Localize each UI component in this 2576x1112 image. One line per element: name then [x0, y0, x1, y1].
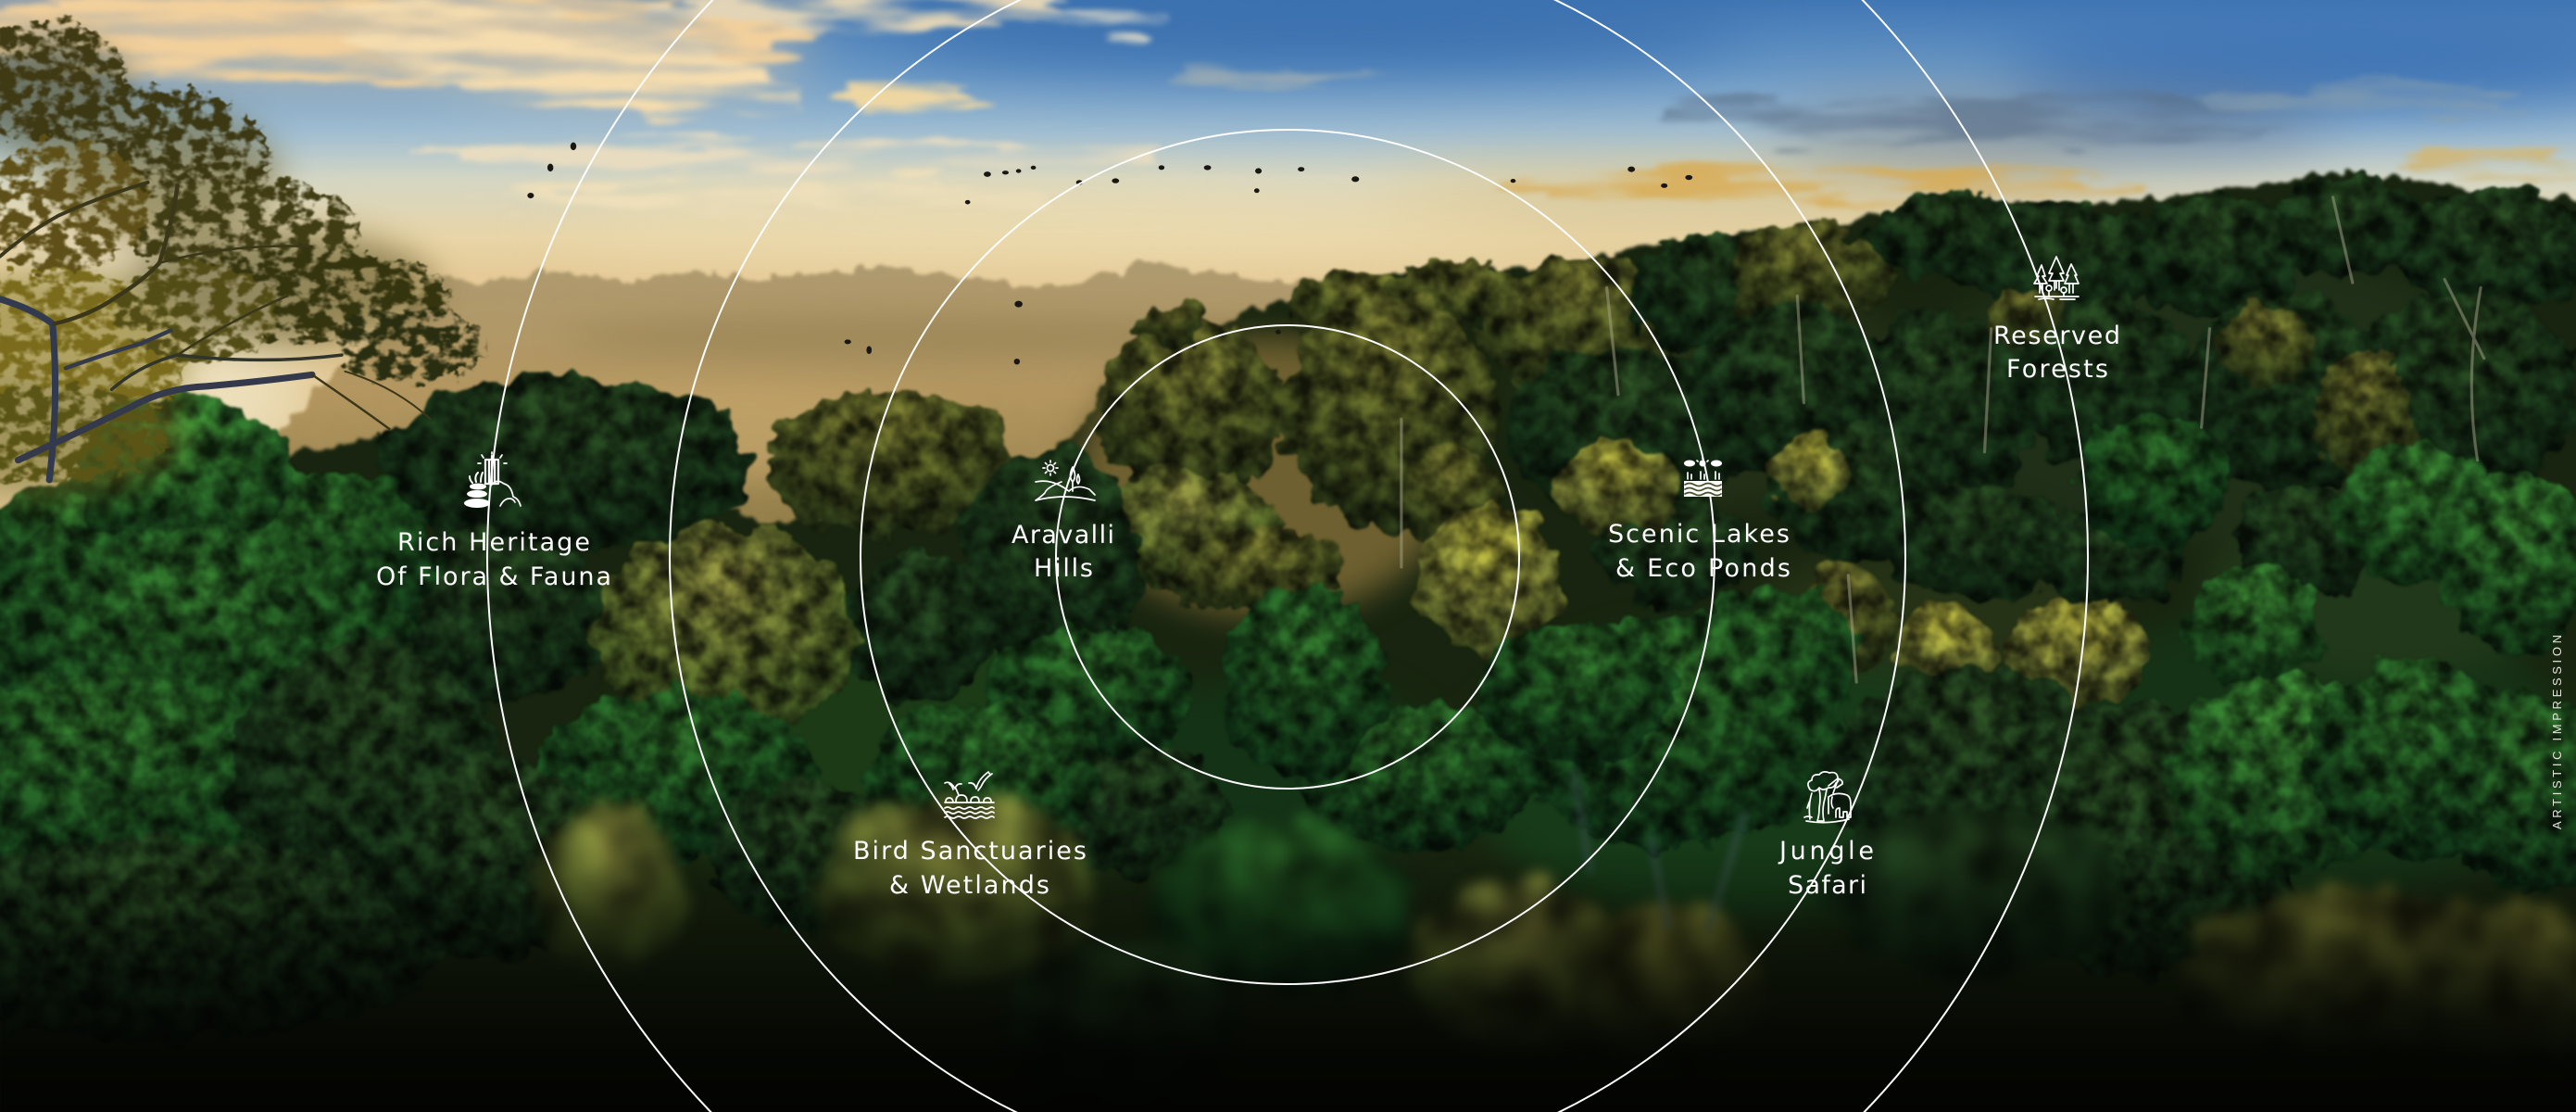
label: Jungle — [1778, 837, 1874, 866]
icon: safari tree and elephant — [1804, 772, 1851, 823]
item: Rich Heritage Of Flora & Fauna — [376, 452, 611, 591]
icon: sun, tree and hills — [1036, 461, 1095, 500]
sky — [0, 0, 2576, 526]
label: & Eco Ponds — [1615, 554, 1791, 583]
label: & Wetlands — [889, 871, 1049, 900]
label: Rich Heritage — [397, 528, 590, 557]
icon: clouds, sun, reeds and lake — [1684, 458, 1722, 497]
label: Aravalli — [1012, 521, 1114, 550]
label: Forests — [2006, 355, 2108, 384]
label: Safari — [1788, 871, 1866, 900]
item: Reserved Forests — [1993, 257, 2120, 384]
icon: heritage pillar, stones and hill — [464, 452, 521, 508]
label: Bird Sanctuaries — [853, 837, 1087, 866]
icon: birds over wetlands — [945, 772, 994, 818]
central sunlit crowns — [1087, 293, 2323, 705]
darkening toward bottom — [0, 846, 2576, 1112]
clouds — [0, 0, 2576, 214]
flock of birds — [527, 143, 1692, 364]
left foreground broad tree — [0, 395, 611, 1042]
item: Bird Sanctuaries & Wetlands — [853, 772, 1087, 900]
blurred foreground canopy — [535, 795, 2576, 1105]
canopy backdrop glow — [608, 246, 2576, 920]
item: Aravalli Hills — [1012, 461, 1114, 583]
item: Scenic Lakes & Eco Ponds — [1608, 458, 1791, 583]
far canopy crowns — [1289, 174, 2576, 654]
label: Scenic Lakes — [1608, 520, 1790, 549]
item: Jungle Safari — [1778, 772, 1874, 900]
icon: pine trees — [2034, 257, 2079, 299]
mid-ground crowns — [378, 374, 2576, 977]
label: Of Flora & Fauna — [376, 562, 611, 591]
soft foliage mass — [0, 41, 435, 493]
concentric rings — [487, 0, 2088, 1112]
label: Reserved — [1993, 322, 2120, 350]
tree trunks — [1401, 197, 2484, 929]
label: Hills — [1034, 554, 1093, 583]
upper-left tree with branches — [0, 19, 486, 493]
branches — [0, 183, 431, 480]
caption: artistic impression: ARTISTIC IMPRESSION — [2550, 635, 2564, 829]
foliage — [0, 19, 486, 485]
distant misty hills — [197, 263, 1512, 559]
